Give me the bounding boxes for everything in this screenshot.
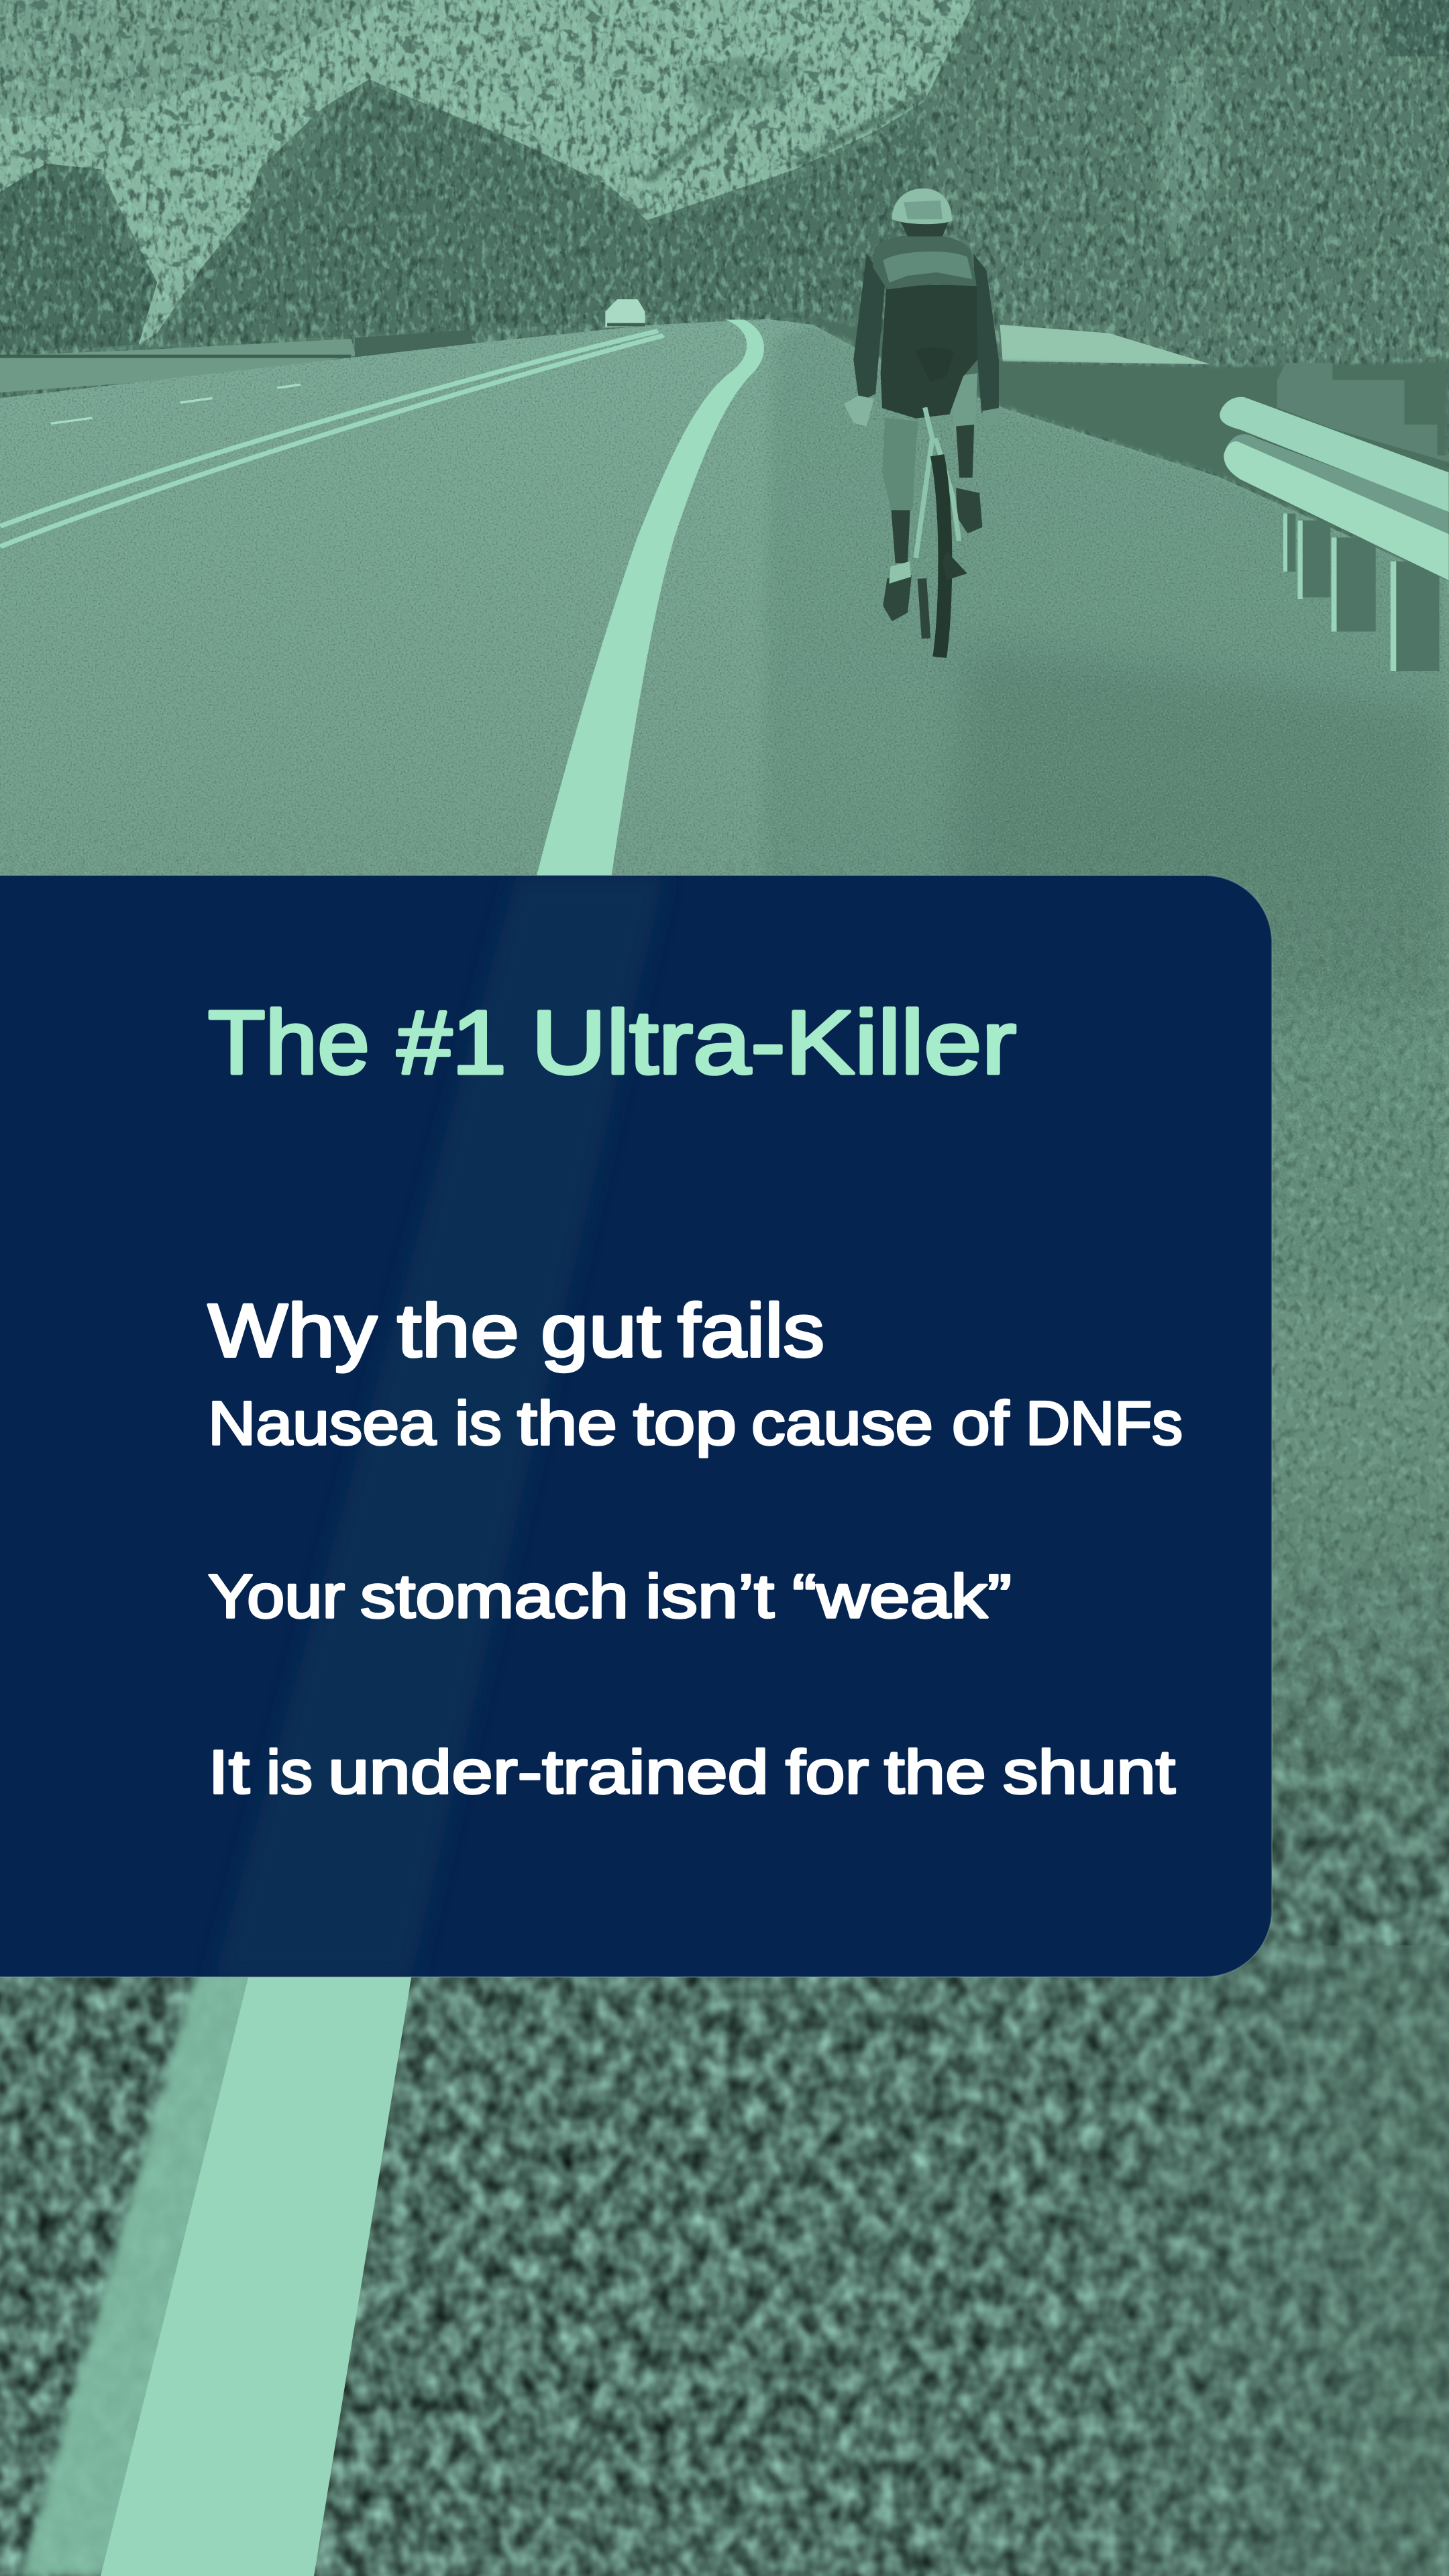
line: It is under-trained for the shunt — [208, 1738, 1175, 1807]
canyon hillside — [0, 0, 1449, 537]
line: It is under-trained for the shunt: for — [786, 1738, 869, 1807]
subheading: fails — [678, 1289, 824, 1373]
white edge line, upper — [534, 319, 764, 885]
line: Nausea is the top cause of DNFs: DNFs — [1026, 1389, 1183, 1458]
subheading — [208, 1289, 824, 1373]
legs — [882, 418, 918, 510]
subheading: gut — [541, 1289, 661, 1373]
neck and helmet — [900, 221, 949, 236]
line: Nausea is the top cause of DNFs: is — [455, 1389, 502, 1458]
title — [208, 993, 1016, 1093]
white edge line, lower — [20, 884, 610, 2576]
arms — [853, 254, 885, 402]
line: Nausea is the top cause of DNFs: cause — [751, 1389, 933, 1458]
title: Ultra-Killer — [531, 993, 1016, 1093]
subheading: Why — [208, 1289, 377, 1373]
line: Nausea is the top cause of DNFs: top — [633, 1389, 737, 1458]
subheading: the — [397, 1289, 519, 1373]
line: It is under-trained for the shunt: is — [266, 1738, 313, 1807]
line: Nausea is the top cause of DNFs — [208, 1389, 1183, 1458]
line: Nausea is the top cause of DNFs: of — [952, 1389, 1009, 1458]
line: Nausea is the top cause of DNFs: the — [517, 1389, 617, 1458]
double centre line and lane dashes — [0, 331, 663, 547]
bicycle frame, wheel and saddle — [916, 407, 959, 558]
line: It is under-trained for the shunt: It — [208, 1738, 250, 1807]
guard rail — [1220, 363, 1449, 671]
line: It is under-trained for the shunt: under-trained — [328, 1738, 769, 1807]
line: Your stomach isn't weak: “weak” — [792, 1562, 1012, 1631]
title: The — [208, 993, 370, 1093]
jersey — [873, 235, 977, 289]
shorts — [881, 284, 977, 419]
line: Your stomach isn't weak — [208, 1562, 1012, 1631]
line: Nausea is the top cause of DNFs: Nausea — [208, 1389, 437, 1458]
line: Your stomach isn't weak: isn’t — [645, 1562, 774, 1631]
title: #1 — [397, 993, 506, 1093]
line: Your stomach isn't weak: stomach — [360, 1562, 629, 1631]
line: Your stomach isn't weak: Your — [208, 1562, 345, 1631]
navy text panel — [0, 875, 1272, 1977]
distant car — [605, 299, 645, 327]
cyclist — [844, 189, 1002, 657]
line: It is under-trained for the shunt: the — [884, 1738, 986, 1807]
roadside grass, distant guard rail and dirt verge — [0, 314, 1449, 582]
line: It is under-trained for the shunt: shunt — [1003, 1738, 1175, 1807]
